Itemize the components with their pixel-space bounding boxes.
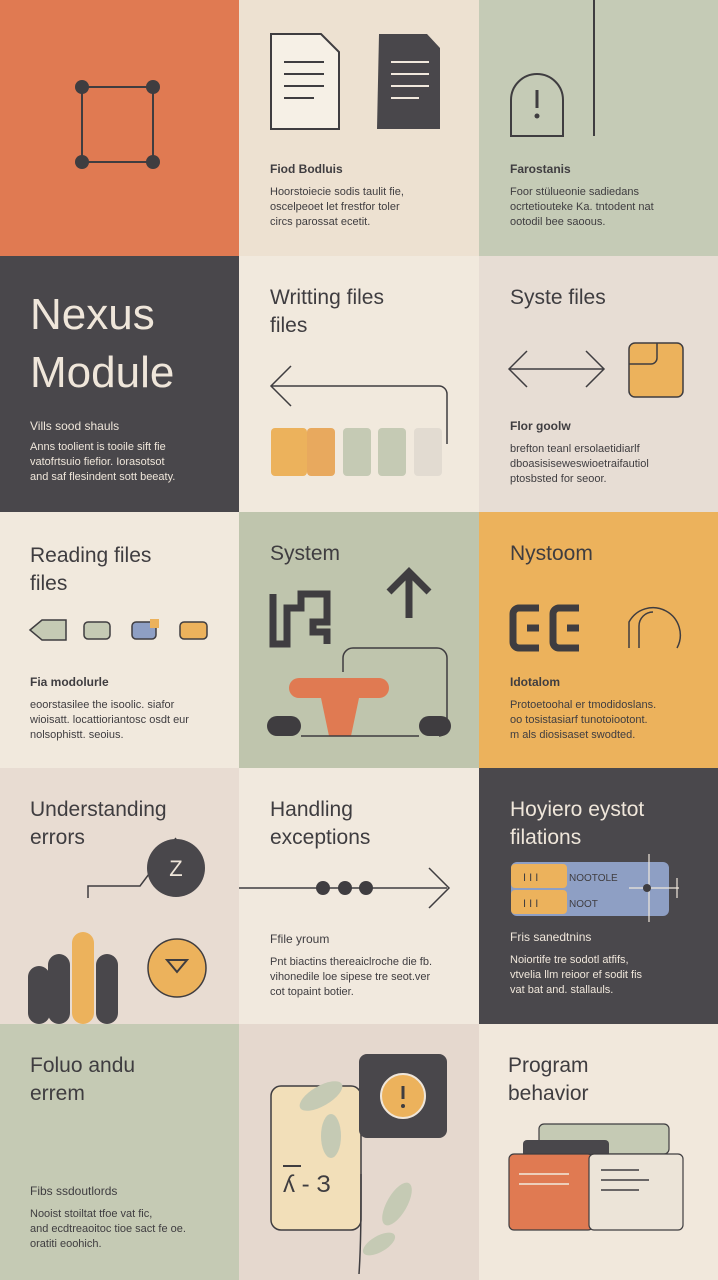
heading [30, 798, 167, 849]
panel: square icon [0, 0, 239, 256]
heading: errem [30, 1082, 85, 1105]
diagram: switch: I I I [523, 872, 538, 884]
heading: Hoyiero eystot [510, 798, 644, 821]
icon: documents [270, 33, 440, 130]
subheading: Flor goolw [510, 419, 571, 433]
title: Module [30, 348, 174, 397]
heading: files [30, 572, 67, 595]
heading: exceptions [270, 826, 370, 849]
panel: files [239, 0, 479, 256]
diagram: switch: NOOTOLE [569, 873, 618, 884]
panel: nystoom [479, 512, 718, 768]
icon: alert bell [510, 0, 595, 137]
panel: writing files [239, 256, 479, 512]
text block: Foor stülueonie sadiedans [510, 186, 639, 198]
text block: vat bat and. stallauls. [510, 984, 613, 996]
text block: m als diosisaset swodted. [510, 729, 635, 741]
text block: nolsophistt. seoius. [30, 729, 124, 741]
text block: Noiortife tre sodotl atfifs, [510, 954, 629, 966]
diagram: switch: NOOT [569, 899, 598, 910]
heading: Understanding [30, 798, 167, 821]
text block [30, 1208, 186, 1250]
panel: program behavior [479, 1024, 718, 1280]
subheading: Fia modolurle [30, 675, 109, 689]
text block [270, 186, 404, 228]
heading: errors [30, 826, 85, 849]
heading [30, 1054, 135, 1105]
subheading: Idotalom [510, 675, 560, 689]
panel: title [0, 256, 239, 512]
subheading: Ffile yroum [270, 932, 329, 946]
text block [510, 954, 642, 996]
panel: understanding errors [0, 768, 239, 1024]
text block: oo tosistasiarf tunotoiootont. [510, 714, 648, 726]
subheading: Farostanis [510, 162, 571, 176]
heading: Syste files [510, 286, 606, 309]
chart: arrow and bars [270, 366, 448, 476]
subheading: Vills sood shauls [30, 419, 119, 433]
text block: vtvelia llm reioor ef sodit fis [510, 969, 642, 981]
panel: reading files [0, 512, 239, 768]
heading: files [270, 314, 307, 337]
heading: Reading files [30, 544, 151, 567]
text block: and ecdtreaoitoc tioe sact fe oe. [30, 1223, 186, 1235]
text block: ootodil bee saoous. [510, 216, 605, 228]
heading: behavior [508, 1082, 589, 1105]
text block: ocrtetiouteke Ka. tntodent nat [510, 201, 654, 213]
text block: Protoetoohal er tmodidoslans. [510, 699, 656, 711]
text block: wioisatt. locattioriantosc osdt eur [30, 714, 189, 726]
panel: handling exceptions [239, 768, 479, 1024]
text block [510, 699, 656, 741]
panel: system [239, 512, 479, 768]
text block: Anns toolient is tooile sift fie [30, 441, 166, 453]
panel: alert card [239, 1024, 479, 1280]
panel: alert [479, 0, 718, 256]
text block: Nooist stoiltat tfoe vat fic, [30, 1208, 152, 1220]
heading: filations [510, 826, 581, 849]
heading [510, 798, 644, 849]
diagram: switch: I I I [523, 898, 538, 910]
arrow with dots [239, 868, 450, 908]
text block: brefton teanl ersolaetidiarlf [510, 443, 640, 455]
chart: bars and icons: Z [169, 856, 183, 881]
diagram: switch [511, 854, 679, 922]
text block: oscelpeoet let frestfor toler [270, 201, 400, 213]
text block [510, 443, 649, 485]
title [30, 290, 174, 397]
text block [30, 699, 189, 741]
heading: Foluo andu [30, 1054, 135, 1077]
text block: circs parossat ecetit. [270, 216, 370, 228]
text block [30, 441, 175, 483]
heading: Handling [270, 798, 353, 821]
text block: and saf flesindent sott beeaty. [30, 471, 175, 483]
illustration: card with leaves [270, 1054, 447, 1274]
icon: square nodes [75, 80, 160, 169]
panel: folio errors [0, 1024, 239, 1280]
heading [270, 286, 384, 337]
text block: cot topaint botier. [270, 986, 354, 998]
heading: System [270, 542, 340, 565]
text block: eoorstasilee the isoolic. siafor [30, 699, 174, 711]
chart: bars and icons [28, 838, 207, 1024]
text block [510, 186, 654, 228]
heading: Writting files [270, 286, 384, 309]
illustration: stacked windows [508, 1123, 684, 1231]
heading [508, 1054, 589, 1105]
illustration: card with leaves: ʎ - З [283, 1171, 331, 1198]
heading [270, 798, 370, 849]
text block [270, 956, 432, 998]
panel: filations [479, 768, 718, 1024]
subheading: Fibs ssdoutlords [30, 1184, 117, 1198]
title: Nexus [30, 290, 155, 339]
subheading: Fiod Bodluis [270, 162, 343, 176]
text block: vatofrtsuio fiefior. Iorasotsot [30, 456, 165, 468]
text block: dboasisiseweswioetraifautiol [510, 458, 649, 470]
icon: double arrow and folder [508, 342, 684, 398]
icon row [28, 619, 208, 641]
icon: glyph shapes [510, 604, 682, 652]
heading [30, 544, 151, 595]
text block: Pnt biactins thereaiclroche die fb. [270, 956, 432, 968]
text block: vihonedile loe sipese tre seot.ver [270, 971, 430, 983]
text block: Hoorstoiecie sodis taulit fie, [270, 186, 404, 198]
illustration: system [267, 567, 451, 737]
panel: system files [479, 256, 718, 512]
text block: ptosbsted for seoor. [510, 473, 607, 485]
text block: oratiti eoohich. [30, 1238, 102, 1250]
heading: Program [508, 1054, 589, 1077]
subheading: Fris sanedtnins [510, 930, 591, 944]
heading: Nystoom [510, 542, 593, 565]
